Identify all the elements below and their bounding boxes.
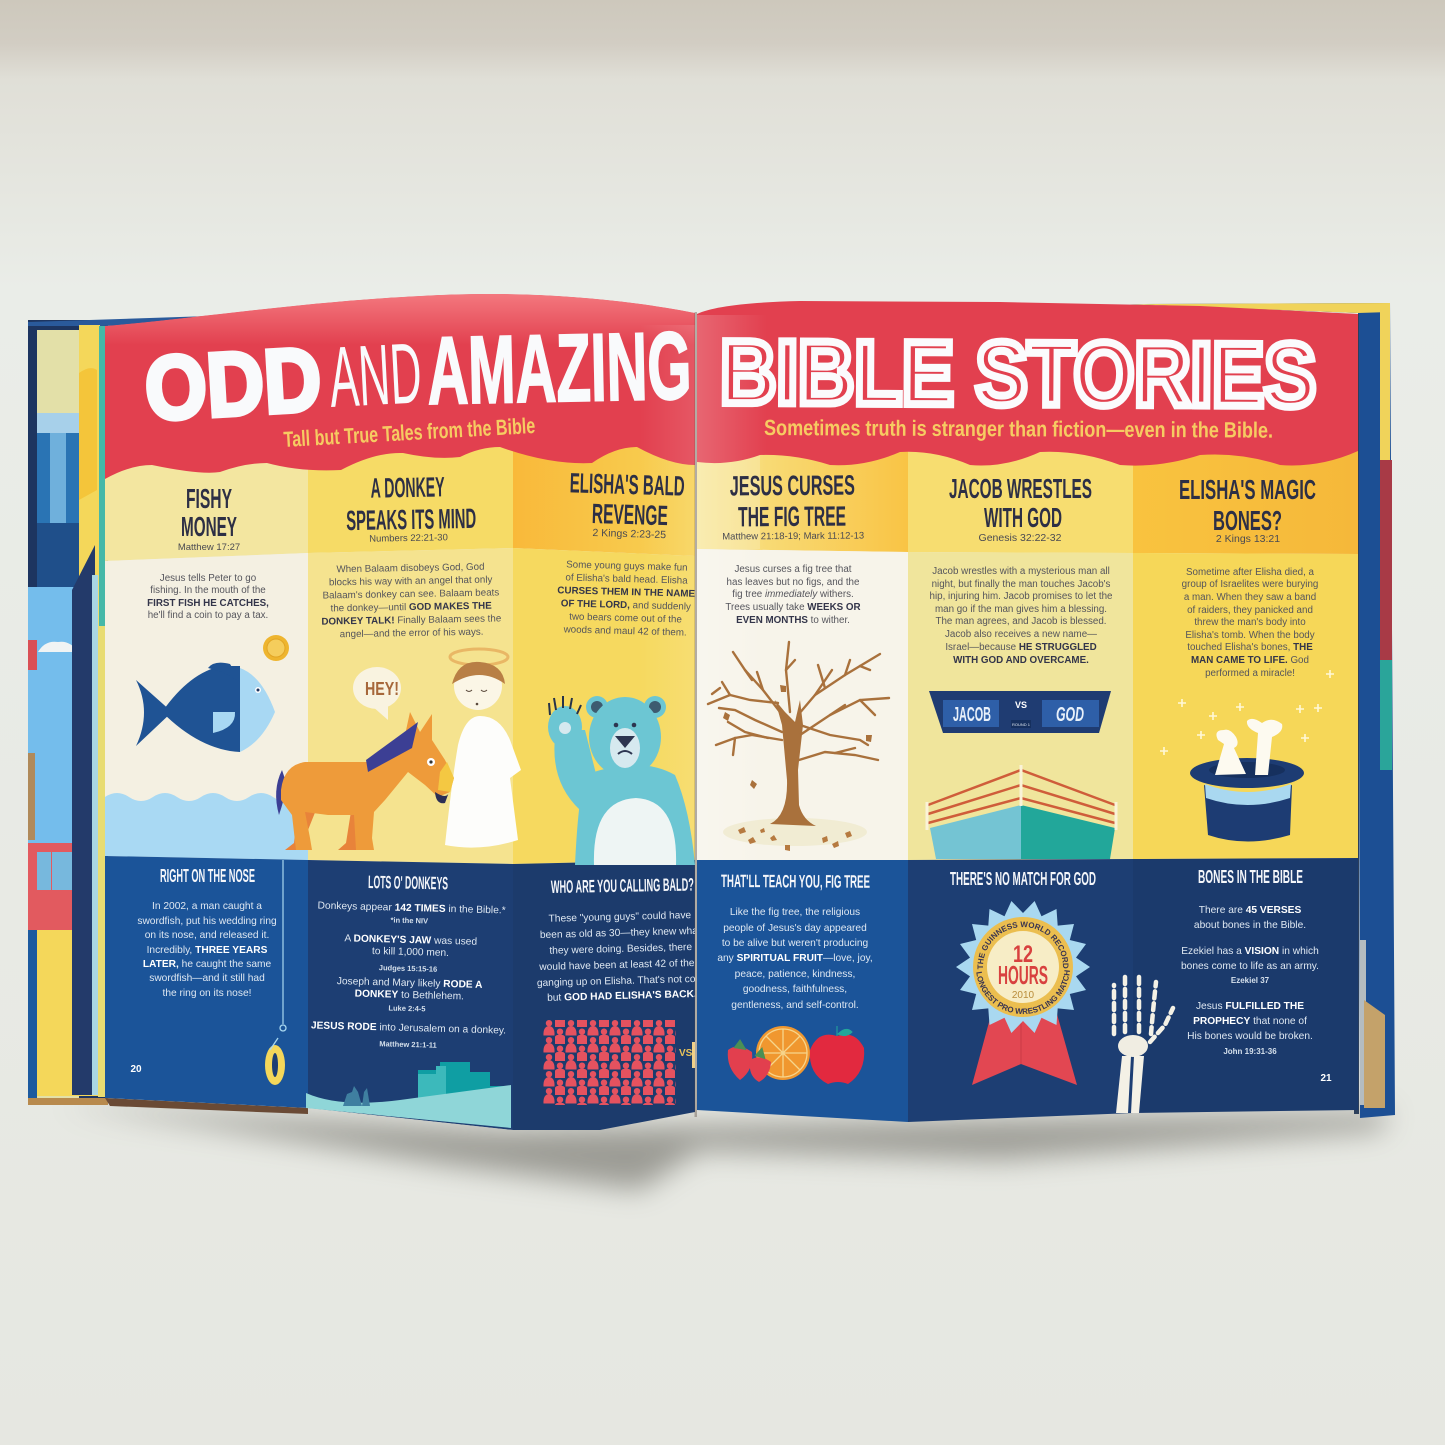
text: lots o' donkeys: *in the NIV [390,915,428,925]
column 3 header band [513,440,695,556]
icon: hook and ring [265,860,286,1085]
heading: elisha's magic bones: ELISHA'S MAGIC [1179,474,1316,505]
red title banner left [105,294,695,479]
heading: a donkey speaks its mind: SPEAKS ITS MIND [346,503,476,536]
text: lots o' donkeys: A DONKEY'S JAW was used [344,933,478,948]
icon: award ribbon badge: LONGEST PRO WRESTLING MATCH [976,970,1070,1014]
column 6 illustration panel [1133,553,1358,859]
column 1 header band [105,463,308,561]
text: jacob wrestles: man go if the man gives him a blessing. [935,604,1107,615]
text: lots o' donkeys: Judges 15:15-16 [379,963,437,974]
icon: magic hat with bones [1190,719,1304,842]
icon: bear [548,696,695,865]
icon: wrestling ring [927,765,1116,859]
vs label: VS [679,1048,693,1059]
text: lots o' donkeys [310,900,509,1052]
icon: award ribbon badge: 12 [1013,941,1033,968]
icon: angel [445,649,521,848]
page number 20: 20 [130,1064,142,1075]
heading: fishy money: FISHY [186,483,232,514]
text: fig tree: Trees usually take WEEKS OR [725,602,861,613]
text: a donkey speaks: the donkey—until GOD MAKES THE [330,601,492,614]
navy panel 6 [1133,858,1358,1113]
right book cover and under-pages [1130,303,1395,1118]
text: fishy money: he'll find a coin to pay a tax. [148,610,268,621]
text: right on the nose: the ring on its nose! [163,988,251,999]
text: lots o' donkeys: DONKEY to Bethlehem. [355,989,464,1002]
heading: jacob wrestles with god: JACOB WRESTLES [949,473,1092,504]
heading: jesus curses the fig tree: THE FIG TREE [738,501,846,532]
text: that'll teach you: gentleness, and self-control. [731,1000,859,1011]
column 4 header band [697,440,908,552]
text: jacob wrestles: WITH GOD AND OVERCAME. [953,655,1089,666]
text: elisha's magic bones: Sometime after Elisha died, a [1186,567,1315,578]
subtitle right: Sometimes truth is stranger than fiction—even in the Bible. [764,415,1273,443]
heading: elisha's bald revenge [568,467,685,542]
text: who are you calling bald: but GOD HAD ELISHA'S BACK. [547,989,697,1004]
text: lots o' donkeys: Luke 2:4-5 [388,1003,426,1013]
title: odd and amazing: AMAZING [426,312,692,425]
icon: gold coin [263,635,289,661]
text: right on the nose [137,901,277,999]
icon: award ribbon badge [956,901,1090,1085]
text: jacob wrestles: The man agrees, and Jacob is blessed. [935,616,1107,627]
text: lots o' donkeys: Joseph and Mary likely RODE A [337,976,483,991]
icon: crowd of young guys [543,1020,676,1105]
icon: award ribbon badge: 2010 [1012,990,1035,1001]
text: a donkey speaks: blocks his way with an angel that only [329,575,493,588]
text: fig tree [725,564,861,626]
text: a donkey speaks: DONKEY TALK! Finally Balaam sees the [321,613,502,628]
text: elisha's bald revenge: of Elisha's bald head. Elisha [565,572,688,587]
text: bones in the bible: Ezekiel has a VISION in which [1181,946,1319,957]
icon: scoreboard: JACOB [953,704,991,726]
icon: sparkles [1160,670,1334,755]
heading: jacob wrestles with god [949,473,1092,544]
heading: fishy money [178,483,240,553]
column 4 illustration panel [697,549,908,860]
text: elisha's bald revenge: CURSES THEM IN THE NAME [557,585,696,600]
text: that'll teach you: goodness, faithfulness, [743,984,847,995]
text: jacob wrestles: night, but finally the man touches Jacob's [932,579,1111,590]
text: that'll teach you: Like the fig tree, the religious [730,907,860,918]
text: that'll teach you: people of Jesus's day appeared [723,923,867,934]
text: jacob wrestles: Jacob also receives a new name— [945,629,1097,640]
text: who are you calling bald: they were doing. Besides, there [549,942,693,957]
text: fig tree: EVEN MONTHS to wither. [736,615,850,626]
icon: scoreboard: VS [1015,700,1027,710]
icon: speech bubble hey [353,667,401,720]
navy panel 1 [105,856,308,1108]
sea [105,793,308,860]
heading: jesus curses the fig tree: JESUS CURSES [730,470,855,501]
heading: a donkey speaks its mind: A DONKEY [370,471,445,504]
icon: speech bubble hey: HEY! [365,679,399,699]
text: fishy money: fishing. In the mouth of the [150,585,266,596]
heading: jesus curses the fig tree [722,470,864,542]
heading: a donkey speaks its mind: Numbers 22:21-30 [369,532,448,545]
heading: that'll teach you, fig tree: THAT'LL TEACH YOU, FIG TREE [721,871,870,892]
column 5 header band [908,440,1133,553]
title: bible stories: BIBLE STORIES [720,323,1316,426]
column 6 header band [1133,440,1358,554]
text: jacob wrestles [930,566,1113,666]
text: lots o' donkeys: Donkeys appear 142 TIMES in the Bible.* [317,901,506,916]
icon: award ribbon badge: HOURS [998,960,1048,990]
text: elisha's magic bones: a man. When they saw a band [1184,592,1316,603]
page number 21: 21 [1320,1073,1332,1084]
vs label [679,1042,695,1068]
column 5 illustration panel [908,552,1133,860]
text: that'll teach you: any SPIRITUAL FRUIT—love, joy, [717,953,873,964]
heading: jesus curses the fig tree: Matthew 21:18-19; Mark 11:12-13 [722,531,864,542]
book shadow [60,1105,1390,1190]
red title banner right [697,301,1358,466]
text: a donkey speaks: Balaam's donkey can see. Balaam beats [322,587,499,602]
illustration: bethlehem scene [306,1062,511,1128]
text: who are you calling bald: These "young guys" could have [548,910,692,925]
text: a donkey speaks [320,561,502,641]
heading: jacob wrestles with god: Genesis 32:22-32 [979,532,1062,544]
subtitle left: Tall but True Tales from the Bible [283,413,536,452]
text: right on the nose: In 2002, a man caught a [152,901,262,912]
icon: donkey [276,712,454,850]
title: odd and amazing: ODD [142,330,324,440]
heading: fishy money: MONEY [181,511,237,542]
text: elisha's magic bones: Elisha's tomb. When the body [1185,630,1315,641]
text: right on the nose: on its nose, and released it. [145,930,269,941]
heading: right on the nose: RIGHT ON THE NOSE [160,866,255,886]
text: lots o' donkeys: JESUS RODE into Jerusalem on a donkey. [311,1020,506,1037]
text: bones in the bible: bones come to life as an army. [1181,961,1319,972]
heading: bones in the bible: BONES IN THE BIBLE [1198,867,1303,887]
text: who are you calling bald: been as old as 30—they knew what [540,926,701,941]
heading: elisha's bald revenge: ELISHA'S BALD [569,467,685,502]
text: that'll teach you [717,907,873,1011]
text: fishy money: Jesus tells Peter to go [160,573,257,584]
left book cover and under-pages [28,312,330,1114]
text: elisha's bald revenge: Some young guys make fun [566,559,688,574]
heading: fishy money: Matthew 17:27 [178,542,240,553]
text: bones in the bible: Ezekiel 37 [1231,976,1270,985]
text: elisha's bald revenge: woods and maul 42 of them. [563,624,687,639]
text: elisha's magic bones: MAN CAME TO LIFE. God [1191,655,1309,666]
text: who are you calling bald: would have been at least 42 of them [538,958,703,973]
heading: elisha's magic bones: BONES? [1213,505,1282,536]
text: right on the nose: LATER, he caught the same [143,959,272,970]
heading: there's no match for god: THERE'S NO MATCH FOR GOD [950,869,1096,889]
text: elisha's magic bones: touched Elisha's bones, THE [1187,642,1313,653]
text: bones in the bible: John 19:31-36 [1223,1047,1277,1056]
text: lots o' donkeys: to kill 1,000 men. [372,946,449,959]
text: jacob wrestles: Jacob wrestles with a mysterious man all [932,566,1110,577]
text: elisha's bald revenge: OF THE LORD, and suddenly [561,598,691,613]
text: jacob wrestles: hip, injuring him. Jacob promises to let the [930,591,1113,602]
text: bones in the bible: His bones would be broken. [1187,1031,1313,1042]
icon: scoreboard: GOD [1056,704,1084,726]
navy panel 4 [697,860,908,1122]
icon: award ribbon badge: THE GUINNESS WORLD RECORD [978,922,1068,970]
text: elisha's magic bones: performed a miracle! [1205,668,1295,679]
heading: jacob wrestles with god: WITH GOD [984,502,1062,533]
navy panel 5 [908,859,1133,1122]
column 3 illustration panel [513,548,695,864]
text: elisha's magic bones: threw the man's body into [1194,617,1306,628]
title: odd and amazing [142,312,692,440]
gutter shading [640,312,767,1117]
right page [697,301,1358,1122]
text: bones in the bible: Jesus FULFILLED THE [1196,1001,1304,1012]
icon: skeleton hand [1114,977,1173,1113]
heading: elisha's bald revenge: 2 Kings 2:23-25 [592,527,666,541]
text: right on the nose: Incredibly, THREE YEARS [147,945,268,956]
heading: elisha's bald revenge: REVENGE [591,498,668,531]
navy panel 2 [308,860,513,1130]
text: elisha's magic bones [1182,567,1318,679]
text: lots o' donkeys: Matthew 21:1-11 [379,1039,437,1050]
text: bones in the bible [1181,905,1319,1056]
text: bones in the bible: PROPHECY that none of [1193,1016,1307,1027]
column 2 illustration panel [308,548,513,864]
text: elisha's magic bones: of raiders, they panicked and [1187,605,1313,616]
text: bones in the bible: There are 45 VERSES [1199,905,1301,916]
text: that'll teach you: peace, patience, kindness, [735,969,855,980]
text: jacob wrestles: Israel—because HE STRUGGLED [945,642,1097,653]
text: who are you calling bald: ganging up on Elisha. That's not cool, [537,974,706,989]
heading: a donkey speaks its mind [345,471,477,545]
icon: fruits [728,1026,864,1084]
text: who are you calling bald [537,911,695,1001]
text: LOTS O' DONKEYS [368,872,448,893]
text: bones in the bible: about bones in the Bible. [1194,920,1306,931]
left page [105,294,695,1130]
text: fishy money: FIRST FISH HE CATCHES, [147,598,269,609]
text: a donkey speaks: When Balaam disobeys God, God [336,562,485,575]
text: fig tree: has leaves but no figs, and the [727,577,860,588]
column 1 illustration panel [105,553,308,801]
text: fig tree: fig tree immediately withers. [732,589,854,600]
text: right on the nose: swordfish—and it still had [149,973,265,984]
heading: elisha's magic bones [1179,474,1316,545]
text: a donkey speaks: angel—and the error of his ways. [340,627,484,640]
icon: bare fig tree [708,642,889,851]
text: fishy money [147,573,269,621]
heading: who are you calling bald: WHO ARE YOU CALLING BALD? [551,875,694,897]
text: elisha's magic bones: group of Israelites were burying [1182,579,1318,590]
text: fig tree: Jesus curses a fig tree that [734,564,852,575]
heading: elisha's magic bones: 2 Kings 13:21 [1216,533,1280,545]
icon: scoreboard: ROUND 1 [1012,722,1031,727]
title: odd and amazing: AND [327,325,424,426]
icon: scoreboard [929,691,1111,733]
text: elisha's bald revenge: two bears come out of the [569,612,683,625]
icon: fish [136,663,275,752]
text: elisha's bald revenge [556,559,696,639]
text: right on the nose: swordfish, put his wedding ring [137,916,277,927]
navy panel 3 [513,860,695,1130]
column 2 header band [308,440,513,553]
text: that'll teach you: to be alive but weren't producing [722,938,869,949]
